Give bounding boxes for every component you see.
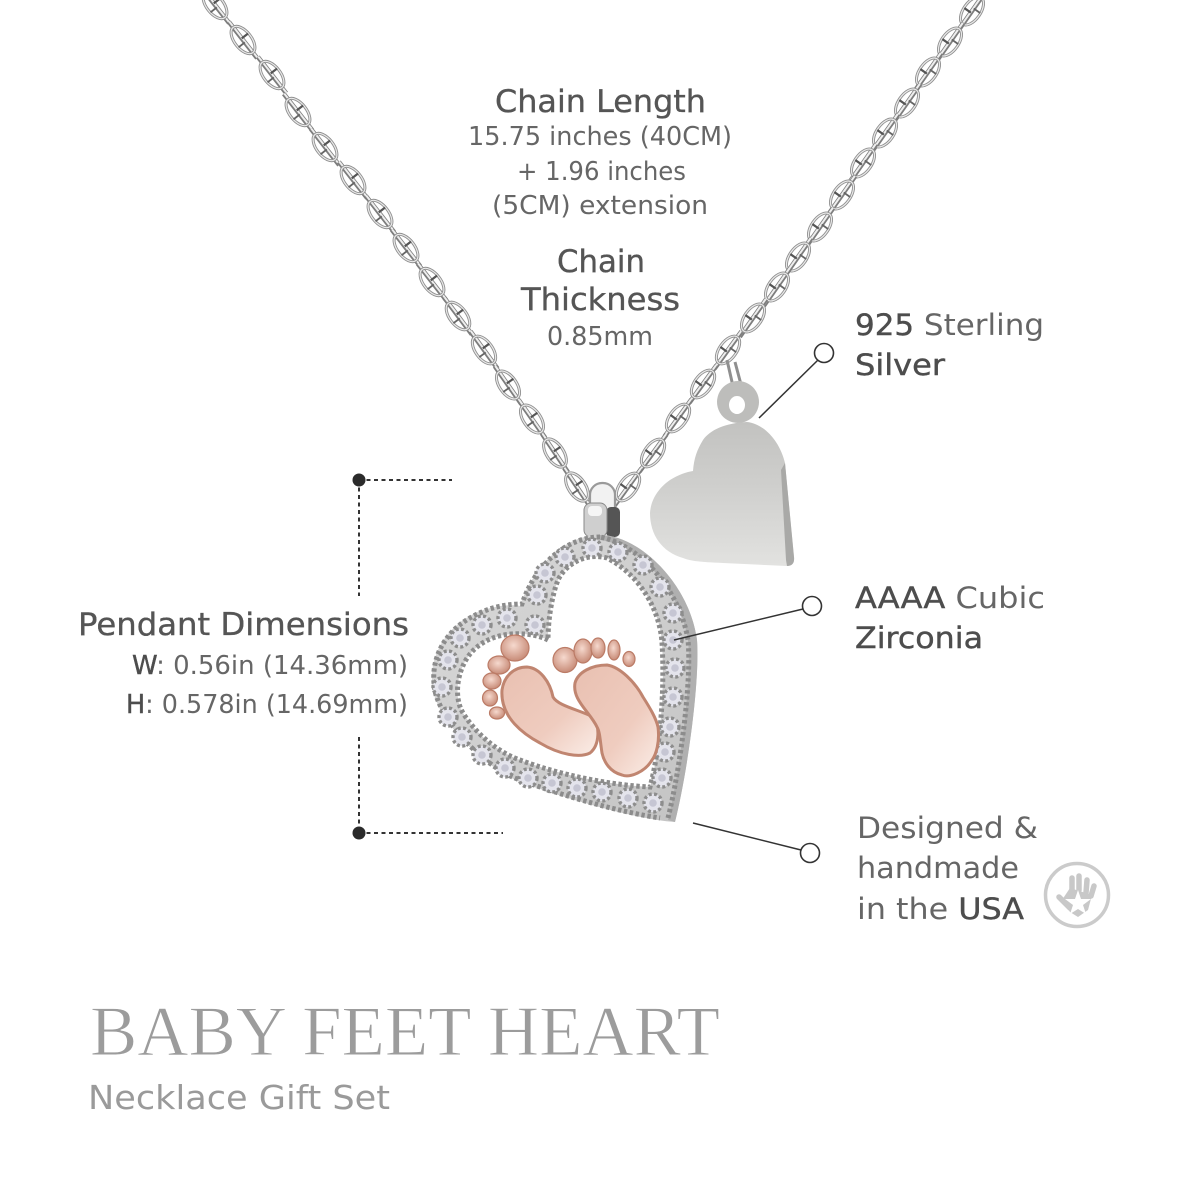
heart tag charm — [650, 360, 794, 566]
heading: chain length — [468, 84, 732, 221]
callout: cubic zirconia: Zirconia — [855, 621, 983, 655]
callout: designed and handmade: Designed & — [857, 811, 1038, 845]
left foot — [482, 635, 598, 755]
pendant dimensions text: Pendant Dimensions — [78, 607, 409, 643]
callout: designed and handmade: in the USA — [857, 892, 1024, 926]
callout: designed and handmade: handmade — [857, 851, 1019, 885]
title — [88, 993, 720, 1117]
title: BABY FEET HEART — [90, 993, 720, 1071]
chain: right strand — [608, 0, 992, 511]
callout: sterling silver: 925 Sterling — [855, 308, 1044, 342]
baby feet — [482, 635, 659, 776]
pendant dimensions text — [78, 607, 409, 720]
pendant dimensions text: H: 0.578in (14.69mm) — [126, 690, 408, 720]
pendant bail — [584, 483, 620, 537]
heading: chain length: 15.75 inches (40CM) — [468, 122, 732, 152]
dimension bracket — [352, 474, 503, 840]
stone row — [433, 539, 684, 812]
heading: chain length: (5CM) extension — [492, 191, 708, 221]
pendant heart frame with stones — [432, 535, 697, 822]
heading: chain length: Chain Length — [495, 84, 706, 120]
heading: chain thickness: Chain — [557, 244, 645, 280]
heading: chain thickness: Thickness — [520, 282, 680, 318]
title: Necklace Gift Set — [88, 1078, 390, 1117]
callout: cubic zirconia: AAAA Cubic — [855, 581, 1045, 615]
pendant dimensions text: W: 0.56in (14.36mm) — [132, 651, 408, 681]
heading: chain length: + 1.96 inches — [517, 157, 686, 187]
chain: left strand — [194, 0, 597, 511]
callout: designed and handmade — [693, 811, 1038, 926]
right foot — [553, 638, 659, 776]
callout: cubic zirconia — [674, 581, 1045, 655]
callout: sterling silver — [759, 308, 1044, 418]
icon: hand with star — [1046, 864, 1108, 926]
heading: chain thickness: 0.85mm — [547, 322, 653, 352]
callout: sterling silver: Silver — [855, 348, 945, 382]
heading: chain thickness — [520, 244, 680, 352]
